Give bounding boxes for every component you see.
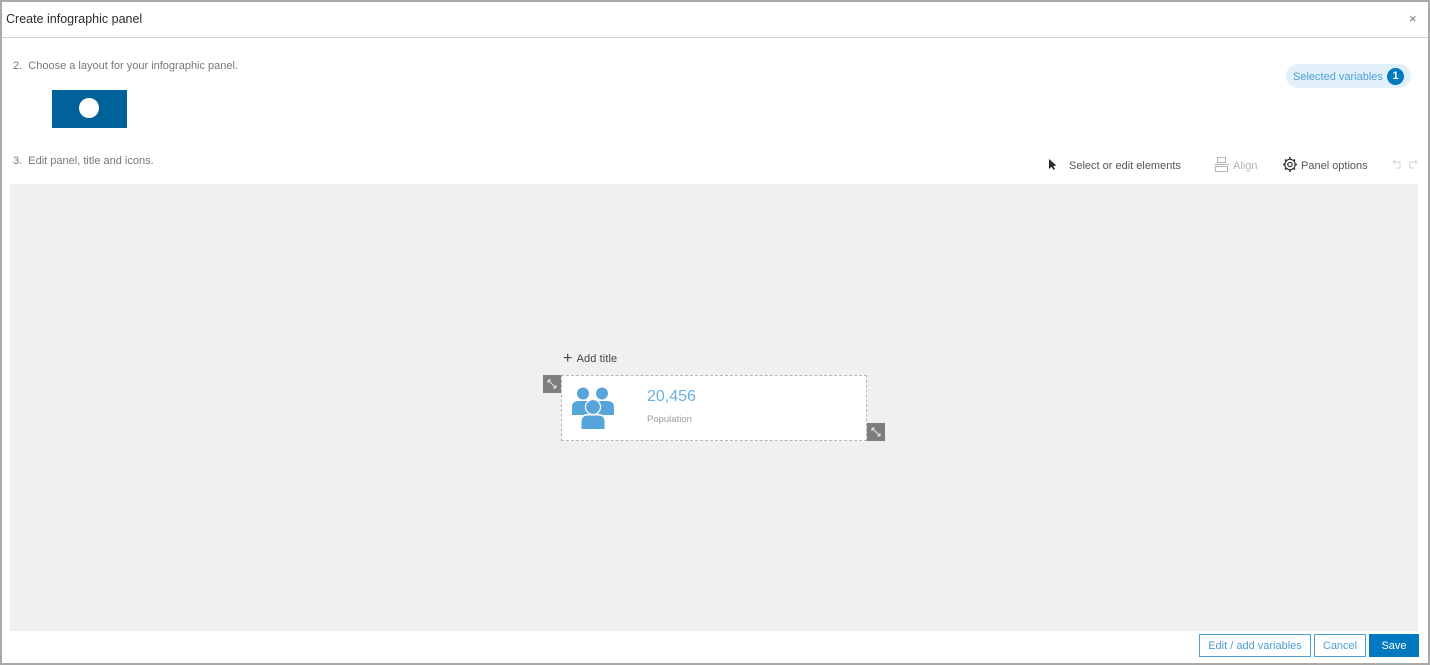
pill label: Selected variables (1293, 70, 1383, 82)
title: Create infographic panel (6, 12, 142, 26)
icon: people (572, 388, 614, 429)
icon: gear (1283, 157, 1297, 172)
resize arrow (548, 380, 556, 388)
save button: Save (1381, 640, 1407, 652)
panel options label: Panel options (1301, 160, 1368, 172)
canvas (10, 184, 1418, 631)
icon: cursor (1049, 159, 1056, 170)
value: 20,456 (647, 388, 696, 405)
edit variables button: Edit / add variables (1208, 640, 1302, 652)
selected variables pill (1286, 64, 1411, 88)
layout circle (79, 98, 99, 118)
icon: align (1214, 157, 1229, 172)
cancel button (1314, 634, 1366, 657)
select tool label: Select or edit elements (1069, 160, 1181, 172)
resize handle: bottom right (867, 423, 885, 441)
add title: + Add title (563, 350, 617, 367)
cancel button: Cancel (1323, 640, 1357, 652)
pill count: 1 (1392, 70, 1399, 82)
edit variables button (1199, 634, 1311, 657)
align label: Align (1233, 160, 1257, 172)
infographic card (561, 375, 867, 441)
step 3 heading: 3. Edit panel, title and icons. (13, 155, 154, 167)
layout thumbnail (52, 90, 127, 128)
icon: undo and redo (1392, 160, 1418, 168)
resize handle: top left (543, 375, 561, 393)
resize arrow (872, 428, 880, 436)
header divider (2, 37, 1428, 38)
value label: Population (647, 414, 692, 425)
icon: close: × (1409, 11, 1417, 26)
pill count (1387, 68, 1404, 84)
save button (1369, 634, 1419, 657)
step 2 heading: 2. Choose a layout for your infographic panel. (13, 60, 238, 72)
